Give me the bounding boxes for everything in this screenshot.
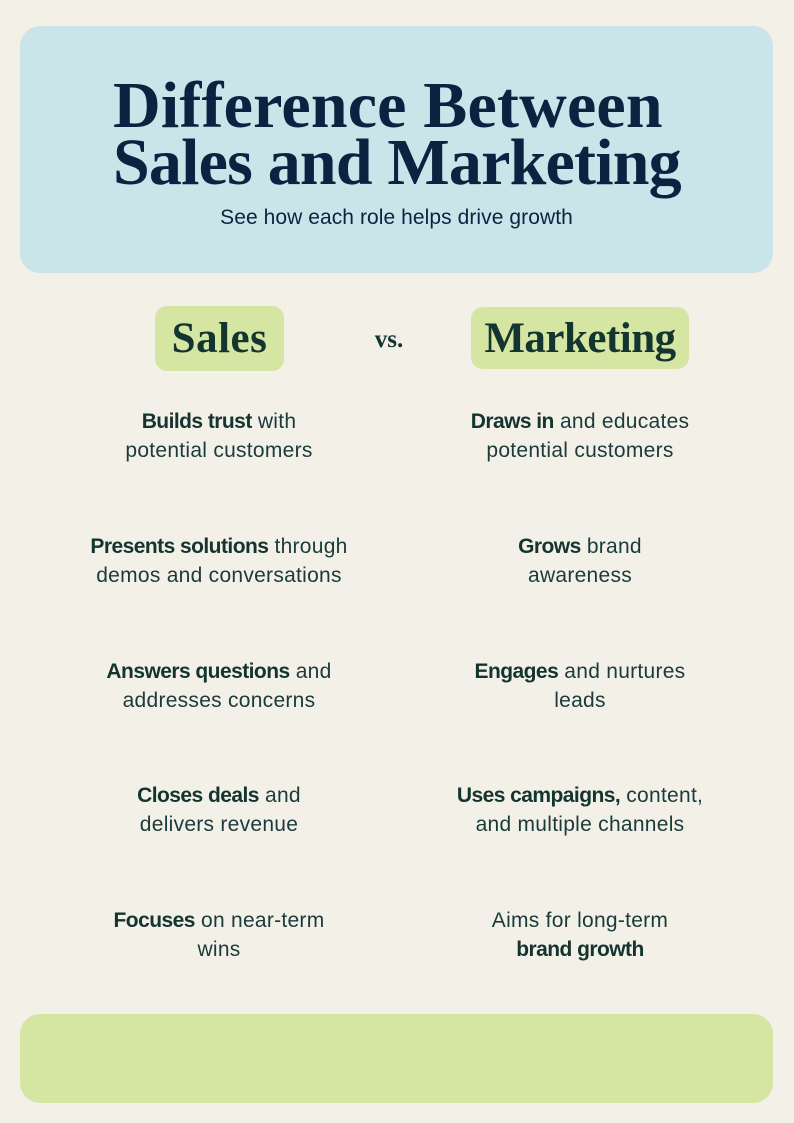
heading: Marketing — [471, 307, 689, 369]
sales item 4 — [137, 784, 301, 836]
vs label: vs. — [375, 326, 403, 353]
sales item 2: Presents solutions through — [90, 535, 348, 558]
marketing item 5 — [492, 909, 668, 961]
title — [113, 69, 681, 199]
sales item 3: Answers questions and — [106, 660, 332, 683]
marketing item 4 — [457, 784, 703, 836]
sales item 1 — [125, 410, 313, 462]
sales item 3: addresses concerns — [123, 689, 315, 712]
marketing item 2: awareness — [528, 564, 632, 587]
marketing item 3: Engages and nurtures — [475, 660, 685, 683]
sales item 1: Builds trust with — [142, 410, 296, 433]
marketing item 1 — [471, 410, 689, 462]
marketing item 1: potential customers — [486, 439, 674, 462]
marketing item 3: leads — [554, 689, 606, 712]
marketing item 2: Grows brand — [518, 535, 642, 558]
title: Difference Between — [113, 69, 663, 142]
marketing item 3 — [475, 660, 685, 712]
sales item 5 — [114, 909, 324, 961]
marketing item 4: and multiple channels — [476, 813, 684, 836]
footer panel — [20, 1014, 773, 1103]
heading: Marketing: Marketing — [484, 315, 676, 362]
sales item 5: wins — [197, 938, 241, 961]
marketing item 5: Aims for long-term — [492, 909, 668, 932]
heading: Sales — [155, 306, 284, 371]
sales item 4: Closes deals and — [137, 784, 301, 807]
marketing item 1: Draws in and educates — [471, 410, 689, 433]
sales item 4: delivers revenue — [140, 813, 298, 836]
marketing item 2 — [518, 535, 642, 587]
marketing item 5: brand growth — [516, 938, 644, 961]
subtitle: See how each role helps drive growth — [220, 206, 573, 229]
sales item 2: demos and conversations — [96, 564, 342, 587]
marketing item 4: Uses campaigns, content, — [457, 784, 703, 807]
sales item 5: Focuses on near-term — [114, 909, 324, 932]
heading: Sales: Sales — [172, 315, 267, 362]
title: Sales and Marketing — [113, 126, 681, 199]
header panel — [20, 26, 773, 273]
sales item 3 — [106, 660, 332, 712]
sales item 1: potential customers — [125, 439, 313, 462]
sales item 2 — [90, 535, 348, 587]
